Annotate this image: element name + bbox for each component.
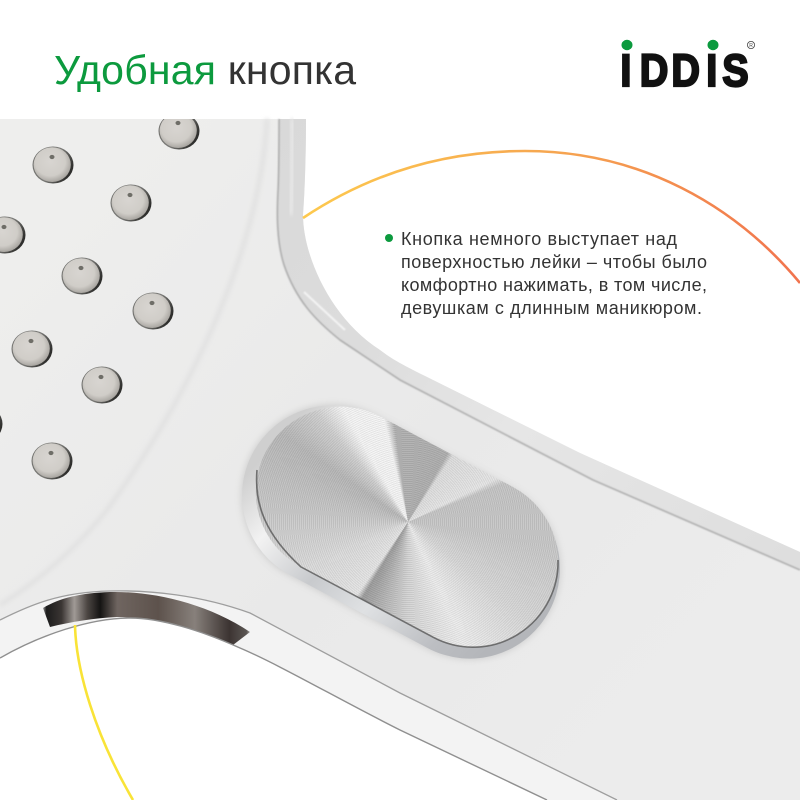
button rim: [257, 470, 558, 647]
caption text: Кнопка немного выступает над: [401, 229, 677, 249]
button bezel: [242, 405, 560, 659]
nozzles: [0, 112, 200, 480]
caption text: девушкам с длинным маникюром.: [401, 298, 702, 318]
bullet: [385, 234, 393, 242]
caption text: [401, 229, 707, 318]
logo: R: [749, 43, 753, 49]
logo: IDDIS: [620, 46, 749, 96]
lower chrome band: [0, 591, 617, 800]
upper chrome band: [277, 119, 800, 570]
spray face ridge: [0, 119, 267, 605]
yellow curve: [75, 625, 133, 800]
metal button: [256, 406, 558, 647]
caption text: комфортно нажимать, в том числе,: [401, 275, 707, 295]
orange curve: [303, 151, 800, 283]
caption text: поверхностью лейки – чтобы было: [401, 252, 707, 272]
title: Удобная кнопка: [54, 47, 356, 93]
